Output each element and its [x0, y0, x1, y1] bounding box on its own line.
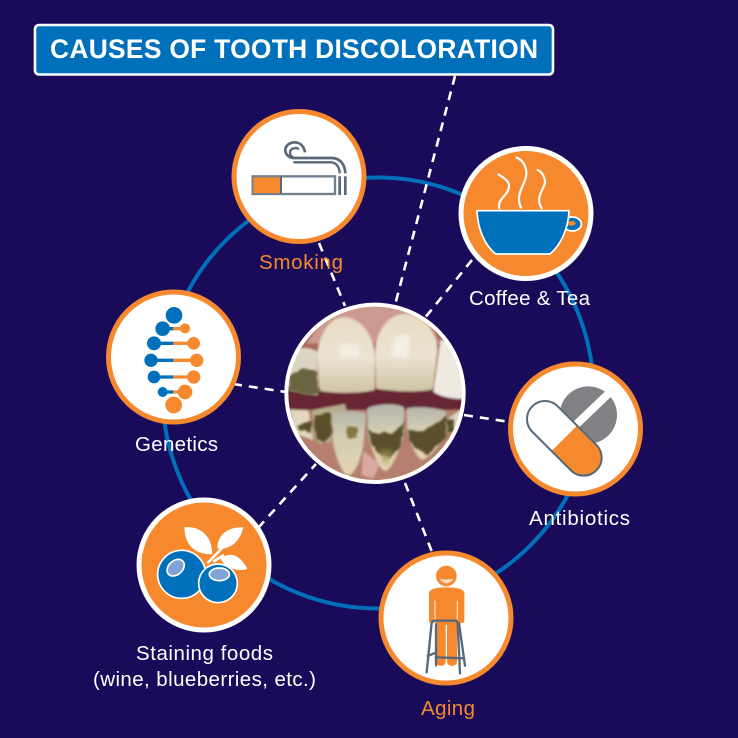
dashed connectors	[233, 76, 510, 552]
coffee badge	[461, 148, 591, 278]
label: staining foods: Staining foods	[136, 642, 273, 665]
panel: staining foods	[93, 500, 316, 691]
icon: person with walker	[427, 566, 465, 673]
icon: blueberries with leaves	[158, 527, 247, 603]
title banner: CAUSES OF TOOTH DISCOLORATION	[50, 34, 538, 64]
antibiotics badge	[510, 364, 640, 494]
title banner	[35, 25, 553, 74]
ring connecting causes	[162, 178, 594, 608]
panel: aging	[381, 553, 511, 720]
panel: antibiotics	[510, 364, 640, 530]
panel: coffee and tea	[461, 148, 591, 310]
icon: coffee cup with steam	[477, 158, 581, 254]
panel: genetics	[108, 292, 238, 456]
staining foods badge	[139, 500, 269, 630]
aging badge	[381, 553, 511, 683]
label: genetics: Genetics	[135, 433, 218, 456]
label: antibiotics: Antibiotics	[529, 507, 630, 530]
label: aging: Aging	[421, 697, 475, 720]
icon: DNA helix	[144, 307, 203, 413]
genetics badge	[108, 292, 238, 422]
icon: cigarette with smoke	[253, 142, 345, 195]
smoking badge	[234, 112, 364, 242]
label: coffee and tea: Coffee & Tea	[469, 287, 591, 310]
central photo: stained teeth	[280, 300, 470, 487]
panel: smoking	[234, 112, 364, 274]
icon: tablet and capsule	[520, 386, 617, 483]
label: smoking: Smoking	[259, 251, 343, 274]
label: examples of staining foods: (wine, blueberries, etc.)	[93, 668, 316, 691]
